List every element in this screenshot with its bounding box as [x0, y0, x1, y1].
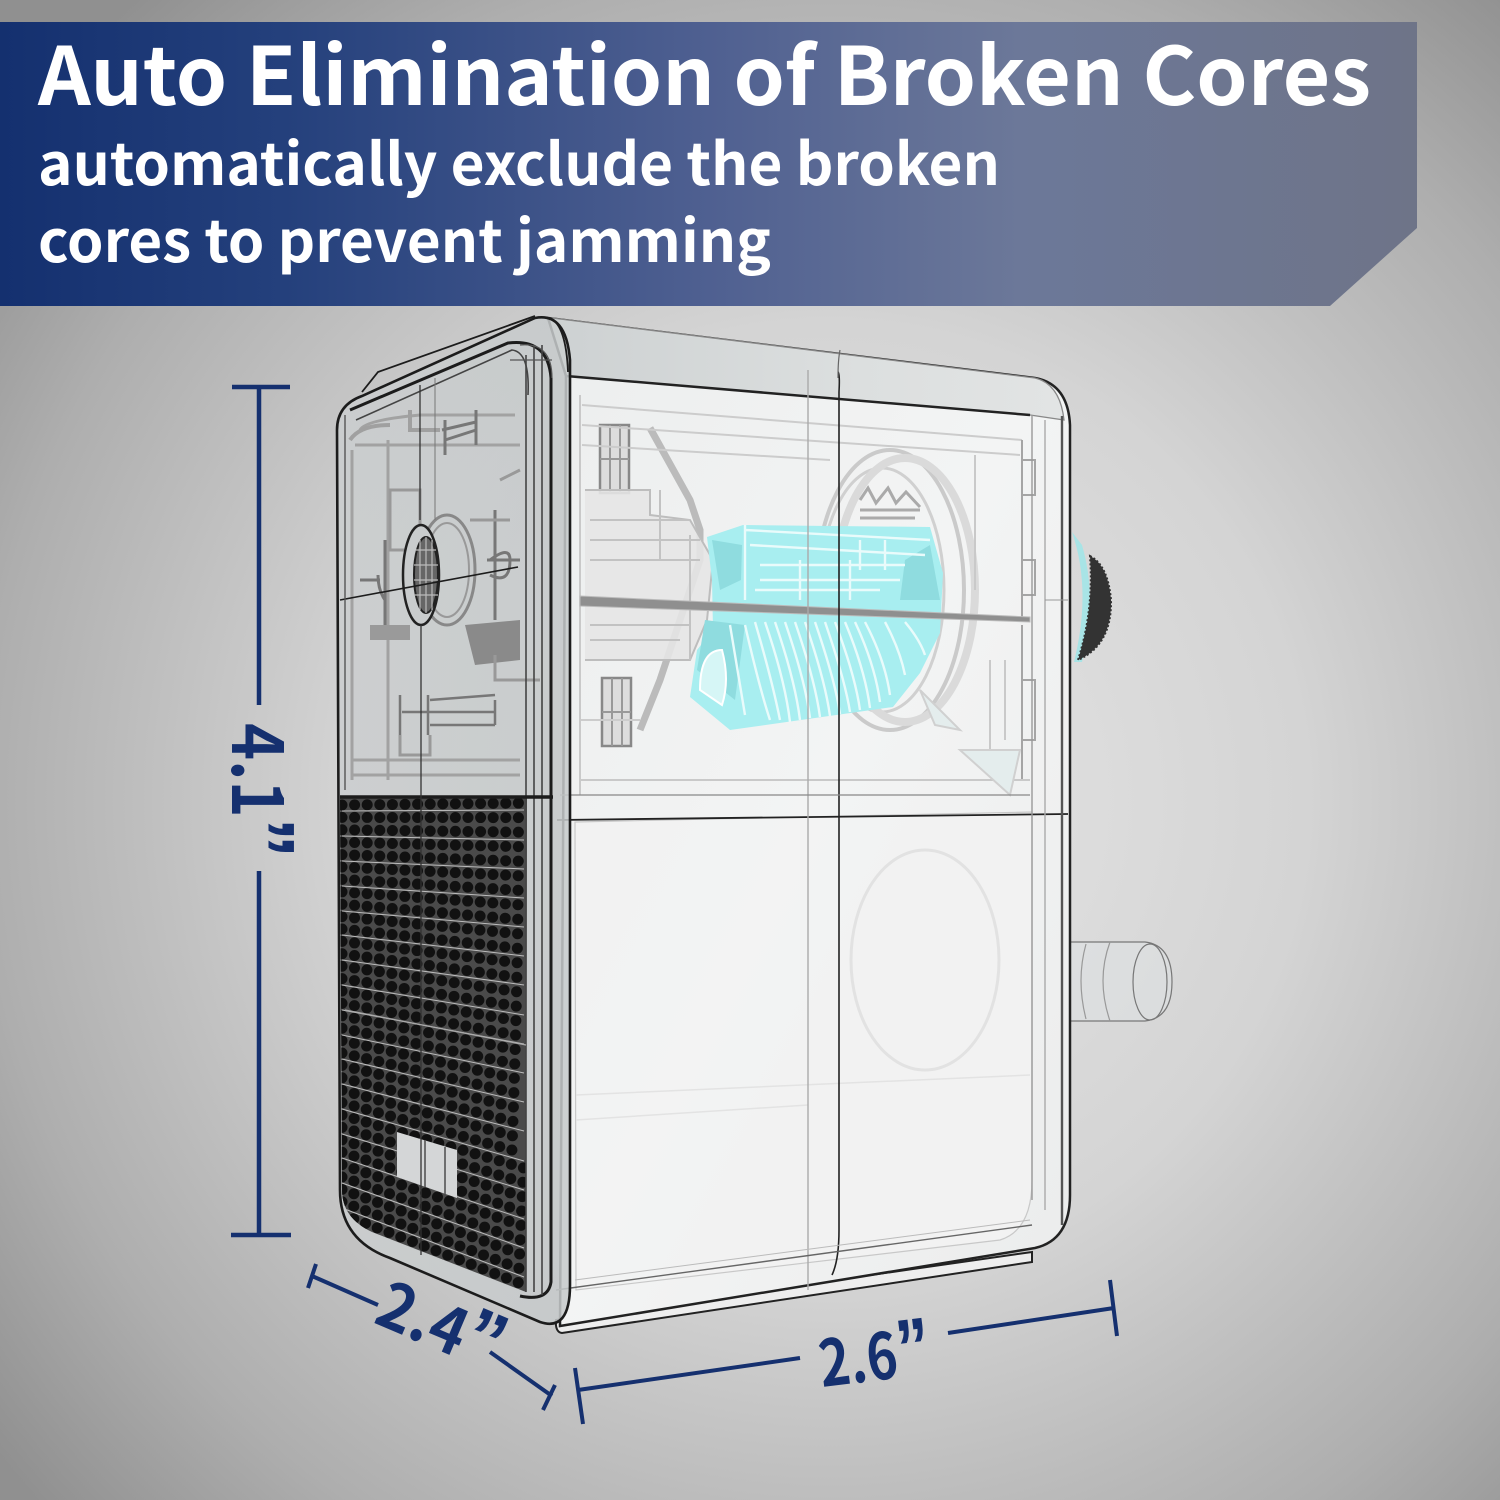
- cyan cutter cylinder: [690, 525, 943, 730]
- lens port: [403, 525, 439, 625]
- left face: [337, 317, 570, 1324]
- left face outlines: [337, 316, 570, 1324]
- dimension: height 4.1: [211, 387, 312, 1235]
- dimension: depth 2.4: [308, 1255, 555, 1410]
- subtitle: [38, 118, 1000, 279]
- dimension: width 2.6: [575, 1280, 1117, 1424]
- top face: [552, 318, 1064, 420]
- title: Auto Elimination of Broken Cores: [37, 13, 1371, 129]
- lower compartment: [575, 812, 1032, 1290]
- shelf band: [580, 596, 1030, 622]
- dimension: height 4.1: 4.1”: [211, 723, 312, 858]
- rear knob: [1072, 532, 1111, 662]
- left internal mechanism: [350, 410, 540, 780]
- panel window: [397, 1132, 457, 1198]
- side tube: [1068, 942, 1172, 1021]
- sharpener device wireframe: [335, 316, 1172, 1333]
- base plate: [556, 1252, 1032, 1333]
- right-face structure lines: [556, 350, 1068, 1290]
- internal mechanism: [580, 395, 1035, 795]
- subtitle: cores to prevent jamming: [38, 195, 771, 279]
- dimension: width 2.6: 2.6”: [813, 1301, 935, 1406]
- subtitle: automatically exclude the broken: [38, 118, 1000, 202]
- right face: [548, 318, 1070, 1326]
- perforated panel: [335, 790, 535, 1300]
- dimension: depth 2.4: 2.4”: [365, 1255, 520, 1390]
- header banner: [0, 13, 1417, 306]
